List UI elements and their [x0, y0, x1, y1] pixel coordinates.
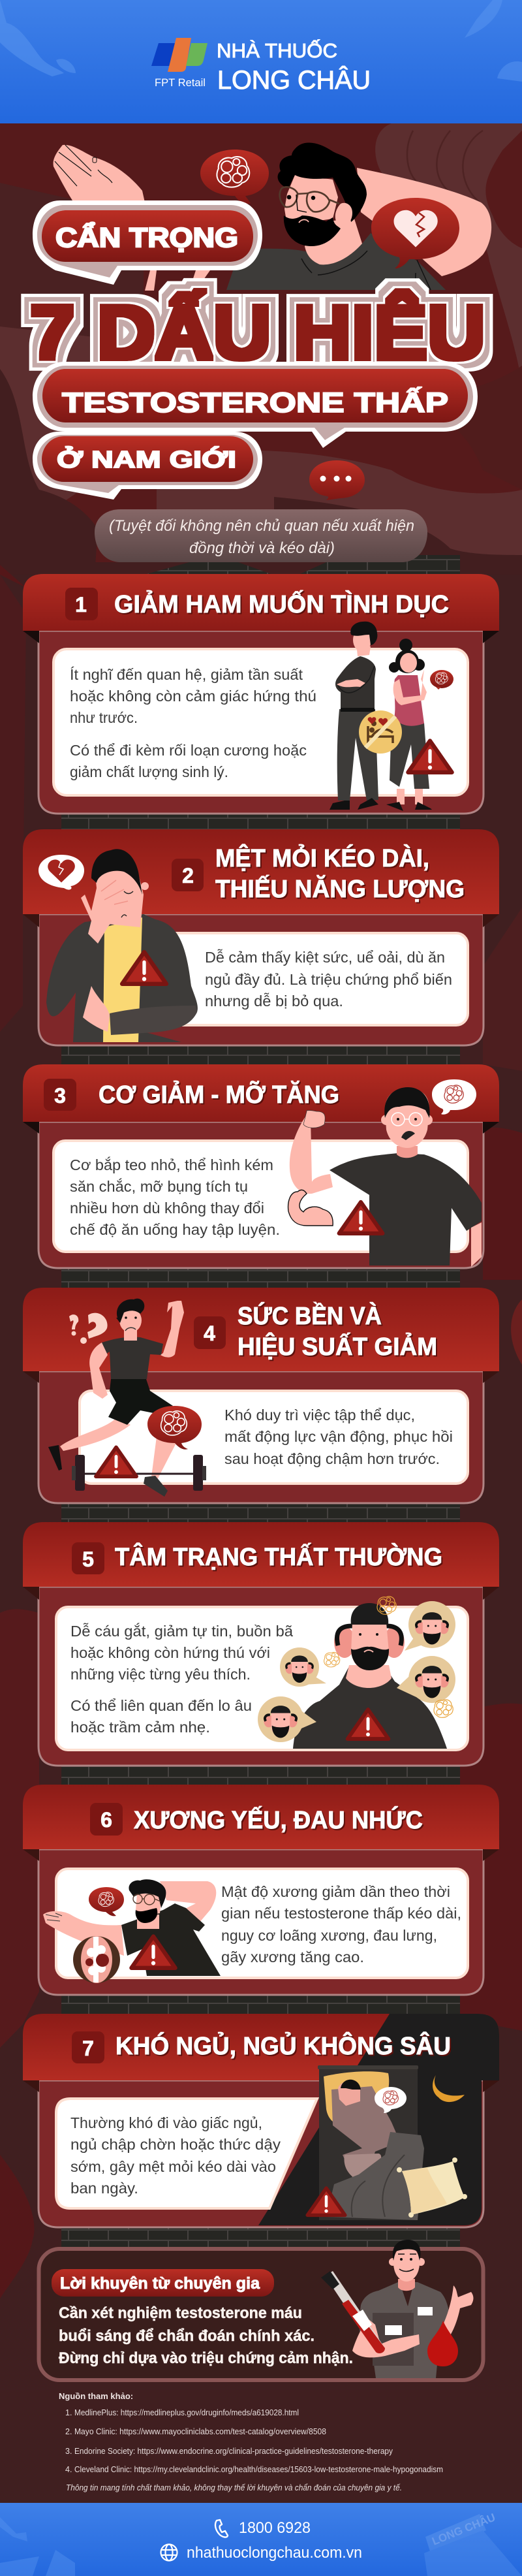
storefront watermark: [424, 2511, 522, 2576]
references: Mayo Clinic: https://www.mayocliniclabs.com/test-catalog/overview/8508: [74, 2427, 326, 2436]
head: [284, 175, 338, 225]
badge 3: 3: [54, 1084, 66, 1107]
text box 4: mất động lực vận động, phục hồi: [224, 1428, 453, 1445]
badge 5: [72, 1542, 104, 1574]
title: 7 dấu hiệu: 7 DẤU HIỆU: [30, 289, 485, 375]
hero panel: [0, 123, 522, 588]
section 7: [23, 2014, 499, 2250]
illustration: man with bone pain: [43, 1879, 221, 1983]
text box 6: [56, 1869, 468, 1978]
note pill: [95, 509, 427, 562]
badge 7: [72, 2031, 104, 2063]
header 1: [23, 574, 499, 631]
text box 1: [54, 649, 468, 795]
text box 6: gãy xương tăng cao.: [221, 1948, 364, 1965]
references: [59, 2391, 443, 2492]
title bubble: cẩn trọng: CẨN TRỌNG: [55, 221, 238, 253]
heading 6: XƯƠNG YẾU, ĐAU NHỨC: [134, 1805, 423, 1834]
badge 3: [44, 1079, 76, 1111]
references: 4.: [65, 2465, 72, 2474]
title bubble: testosterone thấp: [33, 362, 478, 448]
section 1: [23, 574, 499, 833]
header 6: [23, 1785, 499, 1849]
badge 2: [172, 859, 204, 891]
expert advice text: [59, 2304, 353, 2367]
references: Nguồn tham khảo:: [59, 2391, 133, 2401]
badge 2: 2: [182, 864, 194, 887]
illustration: tired man: [38, 849, 198, 1042]
phone number: 1800 6928: [239, 2519, 311, 2537]
hair: [278, 142, 367, 222]
top bricks under note: [147, 555, 460, 574]
text box 3: săn chắc, mỡ bụng tích tụ: [70, 1178, 248, 1195]
section 5: [23, 1522, 499, 1787]
expert advice panel: [39, 2240, 483, 2380]
text box 7: [56, 2099, 317, 2208]
illustration: runner: [48, 1299, 206, 1497]
logo: pharmacy name: NHÀ THUỐC: [217, 39, 337, 62]
footer band: [0, 2503, 522, 2576]
text box 1: hoặc không còn cảm giác hứng thú: [70, 688, 316, 705]
text box 7: Thường khó đi vào giấc ngủ,: [70, 2114, 262, 2131]
illustration: hand: [54, 145, 210, 291]
text box 4: [80, 1391, 468, 1484]
title bubble: ở nam giới: [33, 432, 262, 500]
shirt: [226, 233, 446, 290]
heading 1: GIẢM HAM MUỐN TÌNH DỤC: [114, 589, 449, 618]
badge 4: [194, 1316, 226, 1349]
text box 3: chế độ ăn uống hay tập luyện.: [70, 1221, 280, 1238]
title bubble: ở nam giới: Ở NAM GIỚI: [57, 445, 236, 473]
badge 1: [65, 588, 98, 620]
text box 6: Mật độ xương giảm dần theo thời: [221, 1883, 450, 1900]
illustration: sleepless man in bed: [307, 2065, 467, 2220]
heading 4: HIỆU SUẤT GIẢM: [238, 1332, 437, 1361]
badge 4: 4: [204, 1322, 215, 1345]
text box 2: Dễ cảm thấy kiệt sức, uể oải, dù ăn: [205, 949, 445, 966]
text box 1: như trước.: [70, 709, 138, 726]
beard: [284, 215, 341, 246]
icon: phone: [215, 2520, 228, 2537]
heading 5: TÂM TRẠNG THẤT THƯỜNG: [115, 1542, 442, 1571]
heading 4: SỨC BỀN VÀ: [238, 1301, 382, 1330]
section 3: [23, 1064, 499, 1290]
text box 7: ngủ chập chờn hoặc thức dậy: [70, 2136, 281, 2153]
bubble: broken heart: [371, 198, 459, 268]
badge 6: [90, 1803, 123, 1836]
text box 5: Có thể liên quan đến lo âu: [70, 1697, 252, 1714]
illustration: worried man: [226, 142, 491, 290]
badge 5: 5: [82, 1548, 94, 1571]
heading 3: CƠ GIẢM - MỠ TĂNG: [99, 1080, 339, 1109]
text box 5: hoặc trầm cảm nhẹ.: [70, 1719, 210, 1736]
header 2: [23, 829, 499, 914]
illustration: couple: [330, 622, 453, 811]
text box 5: những việc từng yêu thích.: [70, 1666, 251, 1683]
heading 4: [238, 1301, 437, 1361]
text box 1: Có thể đi kèm rối loạn cương hoặc: [70, 742, 307, 759]
text box 5: hoặc không còn hứng thú với: [70, 1644, 270, 1661]
expert advice text: Đừng chỉ dựa vào triệu chứng cảm nhận.: [59, 2349, 353, 2367]
references: 2.: [65, 2427, 72, 2436]
illustration: flexing man: [288, 1079, 482, 1267]
storefront watermark: LONG CHÂU: [430, 2511, 497, 2548]
night overlay: [258, 2014, 499, 2225]
header 7: [23, 2014, 499, 2080]
text box 5: Dễ cáu gắt, giảm tự tin, buồn bã: [70, 1623, 293, 1640]
note pill: (Tuyệt đối không nên chủ quan nếu xuất hiện: [109, 517, 414, 535]
text box 2: [157, 933, 468, 1025]
section 4: [23, 1288, 499, 1525]
heading 7: KHÓ NGỦ, NGỦ KHÔNG SÂU: [115, 2031, 451, 2060]
heading 2: [215, 844, 465, 903]
header 4: [23, 1288, 499, 1371]
references: MedlinePlus: https://medlineplus.gov/druginfo/meds/a619028.html: [74, 2408, 299, 2417]
expert advice text: Cần xét nghiệm testosterone máu: [59, 2304, 302, 2322]
badge 6: 6: [100, 1808, 112, 1832]
bubble: dots: [309, 460, 365, 500]
logo: FPT mark: [151, 38, 207, 72]
expert advice text: buổi sáng để chẩn đoán chính xác.: [59, 2327, 315, 2345]
text box 5: [56, 1607, 468, 1750]
references: 1.: [65, 2408, 72, 2417]
heading 2: MỆT MỎI KÉO DÀI,: [215, 844, 429, 872]
text box 3: [54, 1141, 468, 1252]
text box 7: sớm, gây mệt mỏi kéo dài vào: [70, 2158, 276, 2175]
text box 6: nguy cơ loãng xương, đau lưng,: [221, 1927, 437, 1944]
text box 3: nhiều hơn dù không thay đổi: [70, 1200, 264, 1216]
section 6: [23, 1785, 499, 2016]
title bubble: cẩn trọng: [33, 200, 262, 285]
references: 3.: [65, 2447, 72, 2456]
illustration: doctor: [321, 2240, 473, 2378]
expert label pill: Lời khuyên từ chuyên gia: [60, 2274, 260, 2293]
text box 1: giảm chất lượng sinh lý.: [70, 763, 228, 780]
text box 2: nhưng dễ bị bỏ qua.: [205, 993, 343, 1010]
heading 2: THIẾU NĂNG LƯỢNG: [215, 874, 465, 903]
illustration: moody man: [258, 1597, 455, 1749]
references: Thông tin mang tính chất tham khảo, không thay thế lời khuyên và chẩn đoán của chuyên gia y tế.: [66, 2483, 402, 2492]
logo: pharmacy name: LONG CHÂU: [217, 65, 371, 95]
note pill: đồng thời và kéo dài): [189, 539, 335, 557]
logo: FPT Retail: FPT Retail: [155, 76, 206, 89]
icon: globe: [161, 2544, 177, 2561]
text box 6: gian nếu testosterone thấp kéo dài,: [221, 1905, 461, 1922]
glasses: [280, 187, 339, 212]
text box 3: Cơ bắp teo nhỏ, thể hình kém: [70, 1156, 273, 1173]
text box 2: ngủ đầy đủ. Là triệu chứng phổ biến: [205, 971, 452, 988]
badge 7: 7: [82, 2037, 94, 2060]
references: Endorine Society: https://www.endocrine.org/clinical-practice-guidelines/testosterone-therapy: [74, 2447, 393, 2456]
title bubble: testosterone thấp: TESTOSTERONE THẤP: [62, 387, 448, 419]
expert label pill: [52, 2269, 274, 2297]
text box 4: Khó duy trì việc tập thể dục,: [224, 1407, 415, 1423]
top header band: [0, 0, 522, 123]
header 5: [23, 1522, 499, 1587]
section 2: [23, 829, 499, 1068]
header 3: [23, 1064, 499, 1122]
website: nhathuoclongchau.com.vn: [187, 2544, 362, 2562]
references: Cleveland Clinic: https://my.clevelandclinic.org/health/diseases/15603-low-testosterone-male-hypogonadism: [74, 2465, 443, 2474]
raised arm behind head: [357, 168, 491, 276]
text box 7: ban ngày.: [70, 2180, 138, 2197]
badge 1: 1: [75, 593, 87, 616]
logo: pharmacy name: [217, 39, 371, 95]
text box 1: Ít nghĩ đến quan hệ, giảm tần suất: [70, 666, 303, 683]
text box 4: sau hoạt động chậm hơn trước.: [224, 1450, 440, 1467]
bubble: brain: [200, 150, 269, 204]
